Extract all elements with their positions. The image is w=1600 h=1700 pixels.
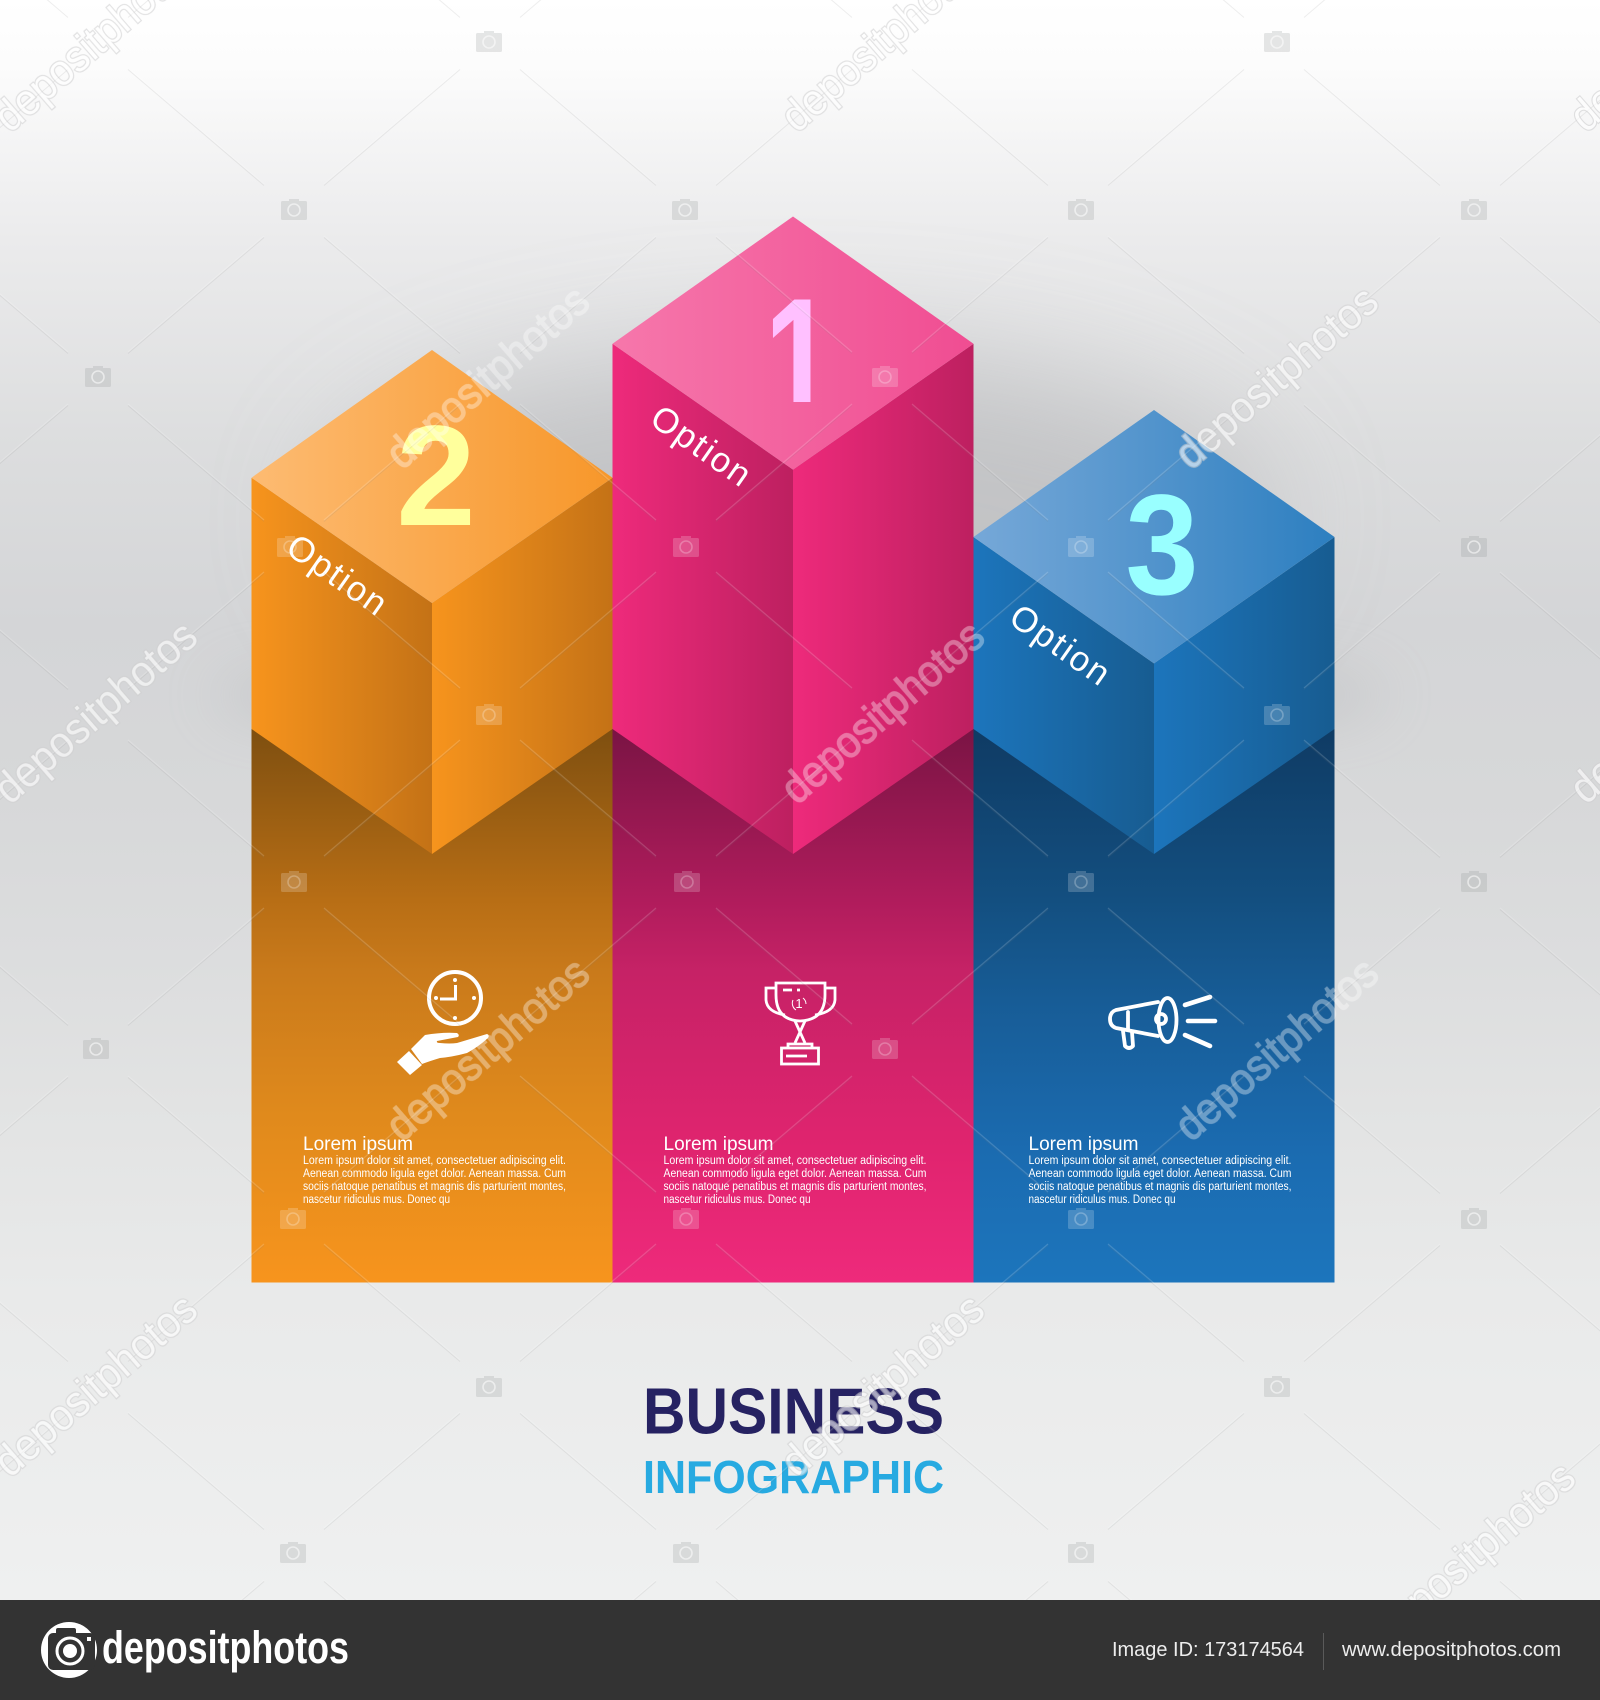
- watermark text on light background: depositphotos: [1165, 276, 1388, 478]
- text block 1: nascetur ridiculus mus. Donec qu: [664, 1194, 810, 1206]
- icon: megaphone: [1110, 997, 1215, 1048]
- watermark text on columns: depositphotos: [771, 611, 994, 813]
- text block 2: Aenean commodo ligula eget dolor. Aenean massa. Cum: [303, 1168, 566, 1180]
- divider: [1323, 1633, 1324, 1670]
- number 2: 2: [396, 397, 476, 556]
- text block 3: Lorem ipsum: [1028, 1133, 1138, 1155]
- column 1: pink: [612, 216, 974, 1282]
- icon: trophy: 1: [795, 996, 803, 1011]
- image id: Image ID: 173174564: [1112, 1639, 1304, 1661]
- title: BUSINESS: [643, 1374, 944, 1448]
- option label 1: Option: [643, 398, 758, 494]
- option label 3: Option: [1002, 597, 1117, 693]
- blue cube: [974, 410, 1334, 854]
- text block 2: [303, 1133, 566, 1206]
- watermark text on light background: depositphotos: [771, 1284, 994, 1486]
- column 2: orange: [252, 350, 612, 1282]
- text block 2: sociis natoque penatibus et magnis dis parturient montes,: [303, 1181, 566, 1193]
- pink column body: [612, 729, 974, 1282]
- pink cube: [612, 216, 974, 854]
- orange cube: [252, 350, 612, 854]
- title: INFOGRAPHIC: [643, 1451, 944, 1503]
- text block 3: [1028, 1133, 1292, 1206]
- watermark text on columns: depositphotos: [376, 276, 599, 478]
- text block 1: sociis natoque penatibus et magnis dis parturient montes,: [664, 1181, 926, 1193]
- text block 1: [664, 1133, 926, 1206]
- watermark text on columns: depositphotos: [376, 948, 599, 1150]
- orange column body: [252, 729, 612, 1282]
- text block 3: Lorem ipsum dolor sit amet, consectetuer adipiscing elit.: [1028, 1155, 1292, 1167]
- text block 3: nascetur ridiculus mus. Donec qu: [1028, 1194, 1176, 1206]
- icon: trophy: [766, 983, 835, 1064]
- column 3: blue: [974, 410, 1334, 1282]
- number 3: 3: [1125, 466, 1199, 625]
- text block 1: Aenean commodo ligula eget dolor. Aenean massa. Cum: [664, 1168, 926, 1180]
- icon: logo camera: [41, 1622, 97, 1678]
- logo wordmark: depositphotos: [102, 1622, 349, 1673]
- number 1: 1: [764, 263, 834, 458]
- text block 1: Lorem ipsum dolor sit amet, consectetuer adipiscing elit.: [664, 1155, 926, 1167]
- blue column body: [974, 729, 1334, 1282]
- text block 3: sociis natoque penatibus et magnis dis parturient montes,: [1028, 1181, 1292, 1193]
- title: [643, 1374, 944, 1503]
- footer bar: [0, 1600, 1600, 1700]
- watermark text on columns: [376, 276, 1388, 1150]
- text block 2: Lorem ipsum dolor sit amet, consectetuer adipiscing elit.: [303, 1155, 566, 1167]
- icon: clock in hand: [397, 972, 489, 1075]
- option label 2: Option: [279, 527, 394, 623]
- text block 3: Aenean commodo ligula eget dolor. Aenean massa. Cum: [1028, 1168, 1292, 1180]
- text block 2: Lorem ipsum: [303, 1133, 413, 1155]
- watermark text on columns: depositphotos: [1165, 948, 1388, 1150]
- watermark text on light background: depositphotos: [1362, 1452, 1585, 1654]
- text block 2: nascetur ridiculus mus. Donec qu: [303, 1194, 450, 1206]
- website: www.depositphotos.com: [1341, 1639, 1561, 1661]
- text block 1: Lorem ipsum: [664, 1133, 774, 1155]
